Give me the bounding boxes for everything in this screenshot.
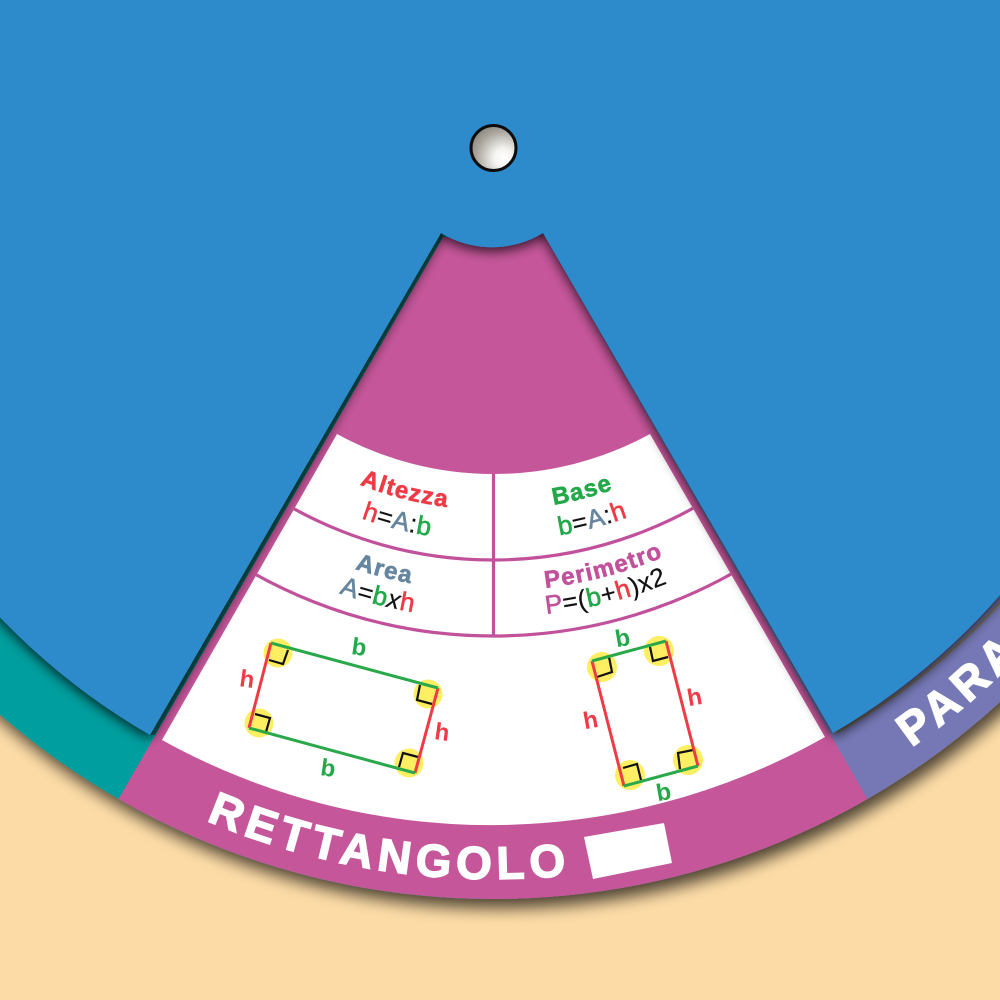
heading: Base: Base	[552, 478, 611, 505]
diagram: portrait rectangle: h	[685, 683, 704, 712]
heading: Altezza: Altezza	[360, 471, 448, 508]
shadowed strip beside wedge	[150, 233, 443, 735]
sector label: RETTANGOLO: RETTANGOLO	[208, 791, 564, 880]
heading: Perimetro: Perimetro	[544, 547, 661, 588]
cell: Area	[338, 554, 414, 612]
cell: Perimetro	[544, 547, 666, 614]
diagram: portrait rectangle	[581, 624, 704, 807]
table dividers	[256, 474, 732, 638]
blue upper disk with wedge window	[0, 0, 1000, 735]
diagram: portrait rectangle: b	[654, 778, 673, 807]
heading: Area: Area	[355, 554, 411, 584]
diagram: landscape rectangle: h	[238, 665, 256, 694]
panel: white formula sector	[162, 434, 825, 825]
cell: Base	[552, 478, 626, 536]
lower wheel with coloured sectors	[0, 233, 1000, 920]
cell: Altezza	[360, 471, 448, 536]
formula: base: b=A:h	[557, 502, 626, 536]
formula: area: A=bxh	[338, 578, 414, 612]
icon: white rectangle	[584, 823, 672, 879]
diagram: landscape rectangle: b	[350, 633, 368, 662]
edge line below blue disk	[836, 600, 1000, 733]
diagram: portrait rectangle: h	[581, 706, 600, 735]
formula: perimeter: P=(b+h)x2	[546, 568, 666, 614]
formula: height: h=A:b	[362, 500, 430, 536]
diagram: portrait rectangle: b	[613, 624, 632, 653]
diagram: landscape rectangle: h	[433, 718, 451, 747]
icon: centre pin	[471, 126, 516, 170]
diagram: landscape rectangle	[238, 633, 451, 783]
diagram: landscape rectangle: b	[319, 754, 337, 783]
